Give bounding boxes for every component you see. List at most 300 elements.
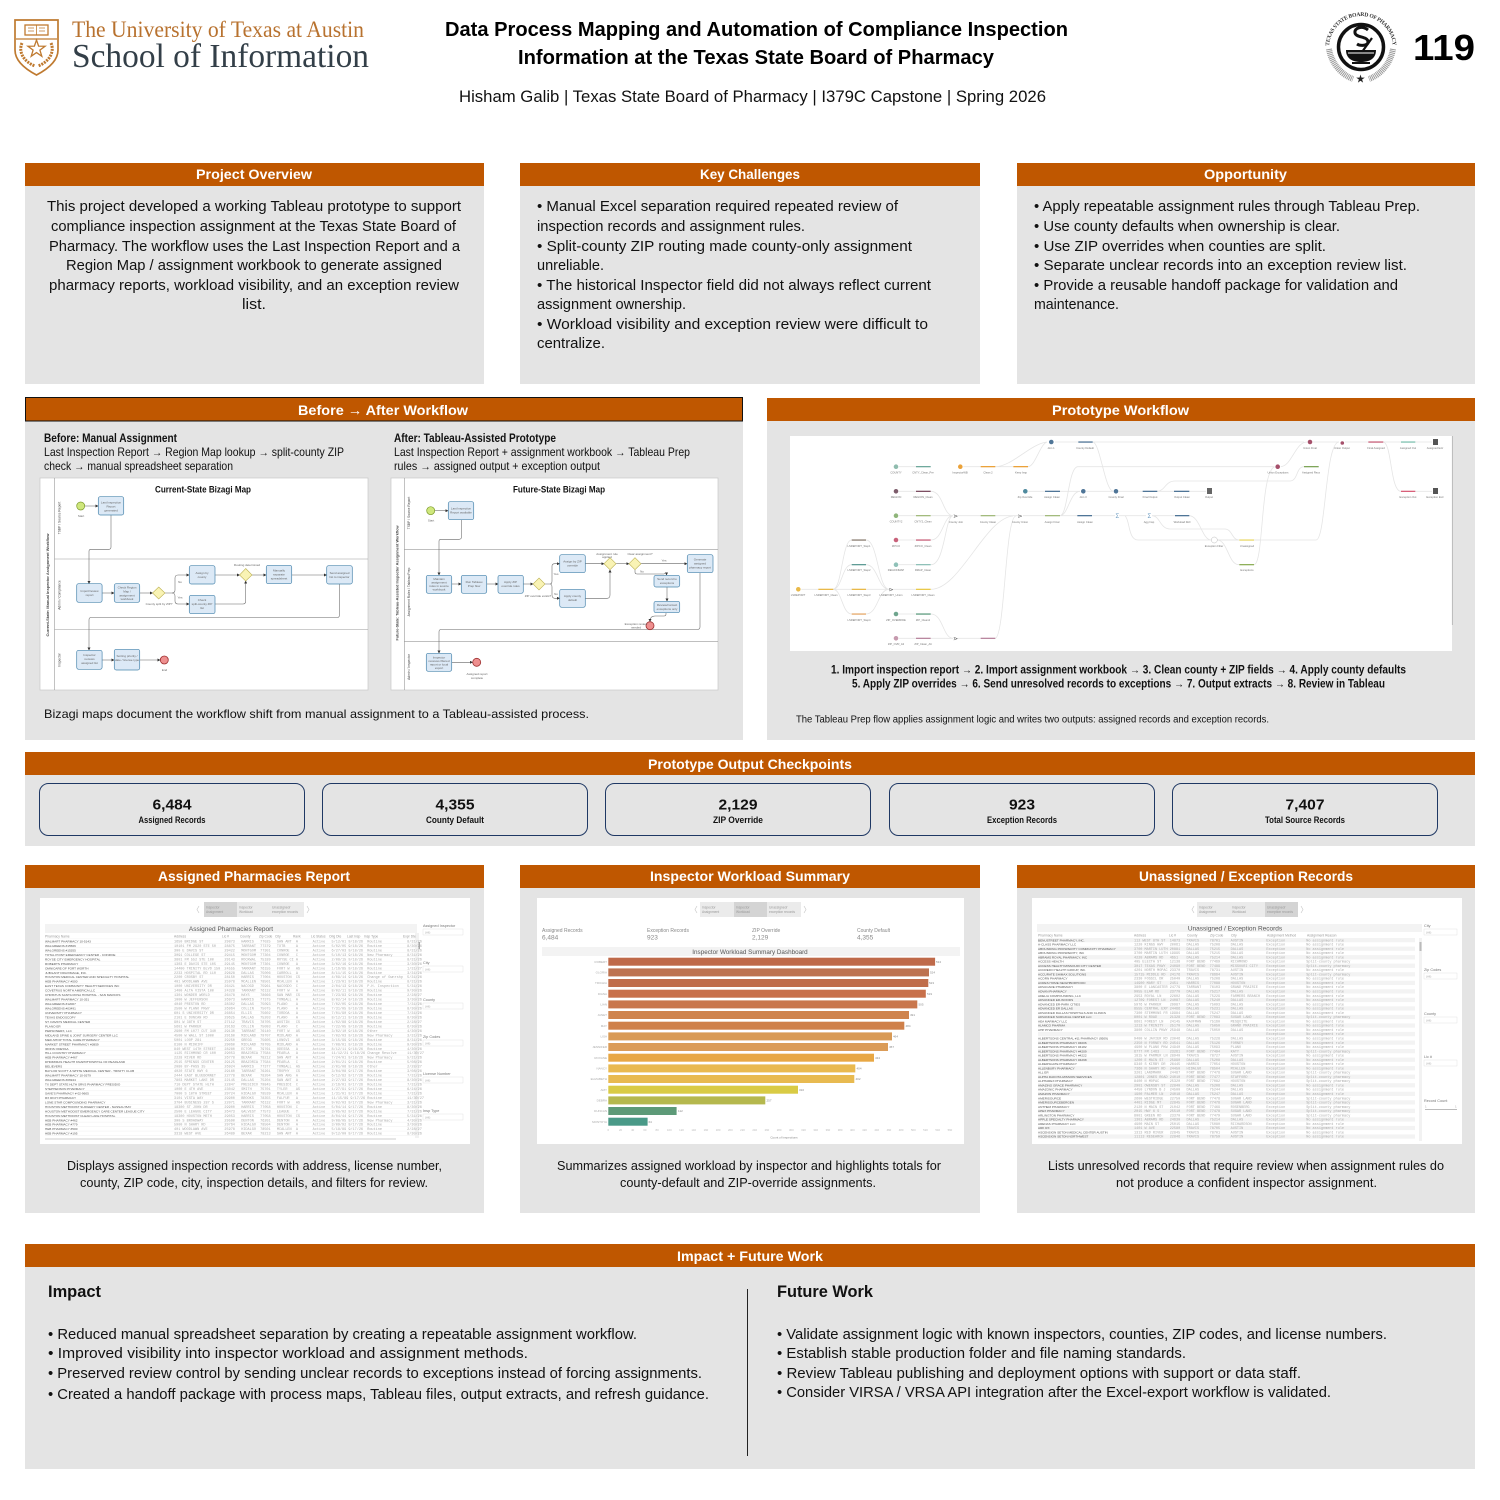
stat card: ZIP Override: 2,129 xyxy=(718,796,758,814)
flow node labels: Output xyxy=(1205,495,1213,499)
chart: current-state Bizagi map: Yes xyxy=(178,596,183,600)
x axis: 240 xyxy=(752,1128,757,1132)
heading: Project Overview: Project Overview xyxy=(196,166,312,182)
stat card: Total Source Records: Total Source Records xyxy=(1265,815,1345,825)
chart: inspector workload dashboard screenshot: Inspector xyxy=(736,906,750,910)
panel: Project Overview xyxy=(25,163,484,384)
table: assigned pharmacies dashboard screenshot: HOUSTON METHODIST SURGERY CENTER - NASSAU BAY xyxy=(45,1105,131,1109)
text block: overview: list. xyxy=(242,297,266,313)
x axis: 260 xyxy=(765,1128,770,1132)
table: exception records dashboard screenshot: Workload xyxy=(1232,910,1246,914)
text block: challenges list: unreliable. xyxy=(537,258,604,274)
column: Future Work: • Consider VIRSA / VRSA API integration after the Excel-export workflow is validated. xyxy=(777,1385,1331,1401)
bar values: 505 xyxy=(918,1002,924,1006)
text block: before description: Before: Manual Assignment xyxy=(44,432,177,445)
table: exception records dashboard screenshot: 2600 WESTRIDGE 22750 FORT BEND 77478 SUGAR LAND Exception Split-county pharmacy xyxy=(1134,1096,1350,1101)
chart: future-state Bizagi map: Generate xyxy=(694,558,707,562)
table: assigned pharmacies dashboard screenshot: WALGREENS #15355 xyxy=(45,948,76,952)
chart: future-state Bizagi map: Yes xyxy=(662,558,667,562)
x axis: 420 xyxy=(862,1128,867,1132)
table: exception records dashboard screenshot: ALBERTSONS CENTRAL #11 PHARMACY (9509) xyxy=(1038,1036,1108,1040)
flow node labels: ZIPCO xyxy=(892,544,900,548)
table: assigned pharmacies dashboard screenshot: 901 W 38TH ST 27112 TRAVIS 78705 AUSTIN CS Active 1/02/88 9/18/26 Routine 2/28/27 xyxy=(174,1020,422,1025)
text block: opportunity list: • Use county defaults when ownership is clear. xyxy=(1034,219,1340,235)
table: assigned pharmacies dashboard screenshot: 2233 HOSPITAL RD 110 29628 DALLAS 75006 CARROLL A Active 8/11/15 9/18/26 Routine 3/31/26 xyxy=(174,971,422,976)
chart: future-state Bizagi map xyxy=(391,478,718,690)
table: exception records dashboard screenshot: ALBERTSONS PHARMACY #4222 xyxy=(1038,1054,1087,1058)
table: assigned pharmacies dashboard screenshot: Expr Dte xyxy=(403,934,416,938)
table: exception records dashboard screenshot: 1213 W TRINITY 25170 DALLAS 75050 GRAND PRAIRIE Exception No assignment rule xyxy=(1134,1024,1344,1029)
x axis: 440 xyxy=(874,1128,879,1132)
table: exception records dashboard screenshot: 4450 LYNDON B J 24500 DALLAS 75244 DALLAS Exception No assignment rule xyxy=(1134,1088,1344,1093)
table: assigned pharmacies dashboard screenshot: 300 S BROADWAY 29590 DENTON 76201 DENTON A Active 9/08/05 9/17/26 New Pharmacy 4/30/26 xyxy=(174,1118,422,1123)
text block: after description: Last Inspection Report + assignment workbook → Tableau Prep xyxy=(394,446,690,459)
panel: Unassigned / Exception Records xyxy=(0,865,1475,1213)
table: assigned pharmacies dashboard screenshot: MIDLAND SPINE & JOINT SURGERY CENTER LLC xyxy=(45,1033,119,1037)
title: Data Process Mapping and Automation of Compliance Inspection xyxy=(445,19,1068,41)
text block: challenges list: assignment ownership. xyxy=(537,297,686,313)
text block: before description: check → manual spreadsheet separation xyxy=(44,460,233,473)
flow node labels: Output Clean xyxy=(1174,495,1190,499)
table: exception records dashboard screenshot: 8001 W ROAD 21328 FORT BEND 77083 SUGAR LAND Exception Split-county pharmacy xyxy=(1134,1015,1350,1020)
table: assigned pharmacies dashboard screenshot: 7803 MARKET LAKE DR 22145 DALLAS 75204 SAN ANT A Active 2/27/83 9/17/26 Routine 8/30/26 xyxy=(174,1078,422,1083)
bar values: 464 xyxy=(893,1034,898,1038)
panel: Prototype Output Checkpoints xyxy=(25,752,1475,846)
panel: Impact + Future Work xyxy=(25,1244,1475,1469)
flow node labels: LSREPORT_Union xyxy=(880,593,903,597)
chart: future-state Bizagi map: assigned xyxy=(694,562,706,566)
x axis: 160 xyxy=(704,1128,709,1132)
text block: challenges list: • The historical Inspector field did not always reflect current xyxy=(537,278,931,294)
bar values: 524 xyxy=(930,970,935,974)
table: exception records dashboard screenshot: ADVAN PHARMACY xyxy=(1038,990,1067,994)
flow node labels: Unassigned xyxy=(1240,544,1255,548)
chart: future-state Bizagi map: Last Inspection xyxy=(451,506,471,510)
table: assigned pharmacies dashboard screenshot: 18300 ST JOHN DR 29900 HARRIS 77058 HOUSTON C Active 5/04/14 9/17/26 Routine 8/30/26 xyxy=(174,1105,422,1110)
table: exception records dashboard screenshot: 112 WEST 8TH ST 14873 TRAVIS 78701 AUSTIN Exception No assignment rule xyxy=(1134,938,1344,943)
table: assigned pharmacies dashboard screenshot: 601 S UNIVERSITY DR 26854 ELLIS 75602 TXRDOA A Active 7/01/90 9/18/26 Routine 7/31/26 xyxy=(174,1011,422,1016)
chart: future-state Bizagi map: override rules xyxy=(501,584,520,588)
KPI row xyxy=(542,928,891,942)
table: exception records dashboard screenshot: 3201 LANDMARK 24487 FORT BEND 77478 SUGAR LAND Exception Split-county pharmacy xyxy=(1134,1071,1350,1076)
panel: Before and After Workflow xyxy=(25,397,743,740)
table: assigned pharmacies dashboard screenshot: 5900 N SHARY RD 29764 HIDALGO 78504 DENTON A Active 3/09/92 9/17/26 Routine 3/30/26 xyxy=(174,1123,422,1128)
filters: exception records: City xyxy=(1424,924,1431,928)
caption: assigned report: Displays assigned inspection records with address, license number, xyxy=(67,1158,442,1173)
table: assigned pharmacies dashboard screenshot: HEB PHARMACY #195 xyxy=(45,1132,78,1136)
table: exception records dashboard screenshot: exception records xyxy=(1267,910,1293,914)
table: assigned pharmacies dashboard screenshot: 2900 FM 1077 CUT 340 29130 TARRANT 76140 FORT W AS Active 3/02/10 9/18/26 Other 4/30/26 xyxy=(174,1029,422,1034)
table: exception records dashboard screenshot: ADVACARE PHARMACY xyxy=(1038,985,1073,989)
text block: overview: pharmacy reports, workload visibility, and an exception review xyxy=(49,278,459,294)
table: exception records dashboard screenshot: 3800 COLLIN PKWY 25948 DALLAS 75050 DALLAS Exception No assignment rule xyxy=(1134,1028,1344,1033)
table: exception records dashboard screenshot: Assignment Reason xyxy=(1307,934,1337,938)
caption: exception records: Lists unresolved records that require review when assignment rules do xyxy=(1048,1158,1444,1173)
chart: current-state Bizagi map: separate xyxy=(273,572,285,576)
KPI row: Exception Records xyxy=(647,928,689,934)
bar values: 112 xyxy=(678,1109,683,1113)
table: assigned pharmacies dashboard screenshot: 1000 W JEFFERSON 26973 HARRIS 77375 TOMBALL A Active 8/02/14 9/18/26 Routine 3/30/26 xyxy=(174,998,422,1003)
bar values: 310 xyxy=(799,1088,804,1092)
table: exception records dashboard screenshot: 2120 N MAIN ST 21042 FORT BEND 77469 ROSENBERG Exception Split-county pharmacy xyxy=(1134,1105,1350,1110)
table: assigned pharmacies dashboard screenshot: HEB PHARMACY #467 xyxy=(45,1056,78,1060)
title xyxy=(445,19,1068,69)
table: assigned pharmacies dashboard screenshot: EAST TEXAS COMMUNITY HEALTH SERVICES INC xyxy=(45,984,120,988)
logo: University of Texas School of Information xyxy=(15,17,369,75)
text block: opportunity list: • Use ZIP overrides when counties are split. xyxy=(1034,239,1326,255)
table: assigned pharmacies dashboard screenshot: BAYLOR SCOTT & WHITE MEDICAL CENTER - TRINITY CLUB xyxy=(45,1069,134,1073)
table: assigned pharmacies dashboard screenshot: 3318 WEST AVE 26489 BEXAR 78213 SAN ANT A Active 9/12/00 9/17/26 Routine 8/30/26 xyxy=(174,1132,422,1137)
flow node labels: Assigned Out xyxy=(1400,446,1416,450)
icon: UT shield xyxy=(15,20,58,75)
table: exception records dashboard screenshot: City xyxy=(1231,934,1237,938)
table: exception records dashboard screenshot: AHP PHARMACY xyxy=(1038,1028,1063,1032)
column: Future Work: Future Work xyxy=(777,1283,874,1301)
flow node labels: REGION xyxy=(891,495,901,499)
table: assigned pharmacies dashboard screenshot: 1301 WONDER WORLD 26478 HAYS 78666 SAN MAR CS Active 7/23/83 9/18/26 Routine 2/28/27 xyxy=(174,993,422,998)
table: exception records dashboard screenshot: ALAMCO PHARMA xyxy=(1038,1024,1066,1028)
flow node labels: Agg Insp xyxy=(1144,520,1155,524)
chart: future-state Bizagi map: Maintain xyxy=(433,577,445,581)
table: assigned pharmacies dashboard screenshot: SAVE'S PHARMACY # 02-9605 xyxy=(45,1091,89,1095)
table: exception records dashboard screenshot: AMAZONIC PHARMACY xyxy=(1038,1088,1073,1092)
table: assigned pharmacies dashboard screenshot: 2500 W PLANO PKWY 26964 COLLIN 75075 PLANO A Active 7/31/05 9/18/26 Routine 8/30/26 xyxy=(174,1007,422,1012)
table: exception records dashboard screenshot: 4220 ABRAMS RD 4651 DALLAS 75214 DALLAS Exception No assignment rule xyxy=(1134,955,1344,960)
chart: future-state Bizagi map: Admin / Inspector xyxy=(407,653,411,680)
chart: future-state Bizagi map: receives filtered xyxy=(428,659,450,663)
chart: current-state Bizagi map: Sorting priority / xyxy=(116,654,138,658)
filters: exception records: (All) xyxy=(1426,1018,1431,1022)
table: exception records dashboard screenshot: 2330 FOSSIL DR 25040 DALLAS 75208 DALLAS Exception No assignment rule xyxy=(1134,977,1344,982)
stat card: ZIP Override xyxy=(606,784,870,836)
panel: Assigned Pharmacies Report xyxy=(0,865,484,1213)
table: exception records dashboard screenshot: 1900 PALMER LN 24018 DALLAS 75247 DALLAS Exception No assignment rule xyxy=(1134,1092,1344,1097)
chart: current-state Bizagi map: split-county ZIP xyxy=(192,602,212,606)
bar names: MAY xyxy=(601,1024,607,1028)
x axis: 520 xyxy=(923,1128,928,1132)
heading: Assigned Pharmacies Report: Assigned Pharmacies Report xyxy=(158,868,350,884)
logo text: school name: School of Information xyxy=(72,38,369,75)
chart: current-state Bizagi map: generated xyxy=(104,508,118,512)
table: assigned pharmacies dashboard screenshot: Address xyxy=(174,934,186,938)
table: exception records dashboard screenshot: Pharmacy Name xyxy=(1038,934,1063,938)
flow node labels: Final Assigned xyxy=(1367,446,1385,450)
table: exception records dashboard screenshot: 9400 W JAVIER RD 23046 DALLAS 75228 DALLAS Exception No assignment rule xyxy=(1134,1036,1344,1041)
chart: future-state Bizagi map: ZIP override exists? xyxy=(525,594,552,598)
table: exception records dashboard screenshot: AMAZING GRACE PHARMACY xyxy=(1038,1083,1082,1087)
filters: exception records: (All) xyxy=(1426,974,1431,978)
table: assigned pharmacies dashboard screenshot: 18300 HOUSTON METH 29053 HARRIS 77058 HOUSTON CS Active 8/04/44 9/17/26 Routine 5/31/26 xyxy=(174,1114,422,1119)
table: assigned pharmacies dashboard screenshot: HEB PHARMACY #500 xyxy=(45,1127,78,1131)
chart: future-state Bizagi map: Future-State Bizagi Map xyxy=(513,484,605,496)
bar values: 434 xyxy=(875,1056,880,1060)
chart: current-state Bizagi map: Map / xyxy=(123,590,131,594)
bar values: 519 xyxy=(927,992,932,996)
flow node labels: County Union xyxy=(1012,520,1029,524)
stat card: Assigned Records: 6,484 xyxy=(152,796,192,814)
chart: future-state Bizagi map: Yes xyxy=(554,572,559,576)
chart: current-state Bizagi map: Check Region xyxy=(118,586,137,590)
table: exception records dashboard screenshot xyxy=(0,898,1462,1144)
x axis: 120 xyxy=(679,1128,684,1132)
flow node labels: ZIP_Clean_Alt xyxy=(914,642,932,646)
table: assigned pharmacies dashboard screenshot: 7000 S 10TH STREET 29724 HIDALGO 78539 MCALLEN A Active 1/31/01 9/17/26 Routine 7/31/26 xyxy=(174,1091,422,1096)
flow node labels: Assigned Recs xyxy=(1302,470,1321,474)
x axis: 300 xyxy=(789,1128,794,1132)
table: exception records dashboard screenshot: 7300 STEMMONS FR 19984 DALLAS 75247 DALLAS Exception No assignment rule xyxy=(1134,1011,1344,1016)
table: exception records dashboard screenshot: Inspector xyxy=(1199,906,1213,910)
table: assigned pharmacies dashboard screenshot: Orig Dte xyxy=(329,934,341,938)
column: Impact: • Created a handoff package with process maps, Tableau files, output extracts, and refresh guidance. xyxy=(48,1387,709,1403)
filters: exception records: 1 xyxy=(1455,1104,1457,1108)
stat card: Total Source Records: 7,407 xyxy=(1286,796,1324,814)
chart: future-state Bizagi map: report or local xyxy=(430,662,449,666)
chart: current-state Bizagi map: Import/review xyxy=(80,589,99,593)
table: assigned pharmacies dashboard screenshot: County xyxy=(240,934,251,938)
table: exception records dashboard screenshot: 8601 FOREST LN 24145 KAUFMAN 75160 MESQUITE Exception No assignment rule xyxy=(1134,1019,1344,1024)
flow node labels: LSREPORT_Clean xyxy=(912,593,935,597)
heading: Key Challenges: Key Challenges xyxy=(700,166,800,182)
KPI row: 4,355 xyxy=(857,934,874,942)
chart: future-state Bizagi map: Report available xyxy=(450,510,472,514)
chart: future-state Bizagi map: Run Tableau xyxy=(466,580,483,584)
table: assigned pharmacies dashboard screenshot: TEXAS ENDOSCOPY xyxy=(45,1015,76,1019)
flow nodes: input circles xyxy=(796,439,1345,641)
KPI row: ZIP Override xyxy=(752,928,780,934)
table: exception records dashboard screenshot: 2953 ROYAL LN 22602 DALLAS 75229 FARMERS BRANCH Exception No assignment rule xyxy=(1134,994,1344,999)
bar values: 534 xyxy=(936,960,941,964)
chart: current-state Bizagi map: Manually xyxy=(273,568,285,572)
table: exception records dashboard screenshot: Address xyxy=(1134,934,1146,938)
table: exception records dashboard screenshot: ACCESS HEALTH xyxy=(1038,960,1064,964)
table: exception records dashboard screenshot: AMERISOURCE xyxy=(1038,1096,1061,1100)
bar names: JENNIFER xyxy=(592,1045,608,1049)
text block: after description: rules → assigned output + exception output xyxy=(394,460,601,473)
filters: assigned report: (All) xyxy=(425,968,430,972)
table: assigned pharmacies dashboard screenshot: 14400 TRINITY BLVD 150 24555 TARRANT 76155 FORT W AS Active 1/16/85 9/18/26 Routine 1/31/27 xyxy=(174,966,422,971)
KPI row: 923 xyxy=(647,934,658,942)
table: exception records dashboard screenshot: 14900 MARY ST 2451 HARRIS 77088 HOUSTON Exception No assignment rule xyxy=(1134,981,1344,986)
text block: challenges list xyxy=(537,199,931,352)
flow node labels: County Join xyxy=(949,520,964,524)
poster number: 119 xyxy=(1413,27,1475,68)
table: exception records dashboard screenshot: A-CLASS PHARMACY LLC xyxy=(1038,943,1077,947)
chart: future-state Bizagi map: exceptions only xyxy=(657,607,678,611)
flow node labels: ZIP_OVR_Alt xyxy=(888,642,904,646)
table: assigned pharmacies dashboard screenshot: 6100 N MIDKIFF 29060 MIDLAND 79705 MIDLAND A Active 7/08/01 9/18/26 Routine 9/30/26 xyxy=(174,1042,422,1047)
table: assigned pharmacies dashboard screenshot: JUBILANT DRAXIMAGE, INC. xyxy=(45,971,87,975)
panel: Inspector Workload Summary xyxy=(520,865,980,1213)
table: exception records dashboard screenshot: 3800 E LANCASTER 24779 TARRANT 76103 GRAND PRAIRIE Exception No assignment rule xyxy=(1134,985,1344,990)
chart: current-state Bizagi map: assignment xyxy=(119,594,135,598)
table: assigned pharmacies dashboard screenshot: WALMART PHARMACY 10-5143 xyxy=(45,939,91,943)
chart: future-state Bizagi map: exceptions xyxy=(660,581,675,585)
filters: assigned report: Assigned Inspector xyxy=(423,924,456,928)
chart: current-state Bizagi map: Admin / Compliance xyxy=(58,580,62,610)
table: exception records dashboard screenshot: ALDERSGATE PHARMACY xyxy=(1038,1062,1077,1066)
x axis: 380 xyxy=(838,1128,843,1132)
chart: future-state Bizagi map: complete xyxy=(471,676,483,680)
table: assigned pharmacies dashboard screenshot: 3704 BUSINESS 287 S 22071 TARRANT 76132 FORT W AS Active 9/02/03 9/17/26 New Pharmacy 3/31/26 xyxy=(174,1100,422,1105)
table: exception records dashboard screenshot: Unassigned / Exception Records xyxy=(1188,926,1283,932)
stat card: Assigned Records: Assigned Records xyxy=(138,815,206,825)
table: exception records dashboard screenshot: ADVANCED ER DALLAS xyxy=(1038,1007,1073,1011)
table: exception records dashboard screenshot: 8400 N MOPAC 25320 FORT BEND 77082 HOUSTON Exception Split-county pharmacy xyxy=(1134,1079,1350,1084)
chart: current-state Bizagi map: Report xyxy=(106,504,116,508)
stat card: County Default xyxy=(322,784,588,836)
table: exception records dashboard screenshot: 4201 NORTH MOPAC 23370 TRAVIS 78731 AUSTIN Exception No assignment rule xyxy=(1134,968,1344,973)
table: assigned pharmacies dashboard screenshot: IRONS ODESSA xyxy=(45,1047,69,1051)
chart: future-state Bizagi map: No xyxy=(640,570,644,574)
caption: workload summary: Summarizes assigned workload by inspector and highlights totals for xyxy=(557,1158,942,1173)
stat card: Exception Records: Exception Records xyxy=(987,815,1057,825)
table: exception records dashboard screenshot: 1313 RED RIVER 22845 TRAVIS 78701 AUSTIN Exception No assignment rule xyxy=(1134,1130,1344,1135)
chart: future-state Bizagi map: Assignment rule xyxy=(596,552,618,556)
chart: current-state Bizagi map: spreadsheet xyxy=(271,576,287,580)
chart: future-state Bizagi map: TSBP / Source Report xyxy=(407,497,411,529)
filters: exception records: Zip Codes xyxy=(1424,968,1441,972)
table: assigned pharmacies dashboard screenshot: PERSONERX, LLC xyxy=(45,1029,73,1033)
chart: current-state Bizagi map: Routing determined xyxy=(234,563,260,567)
icon: Texas State Board of Pharmacy seal: TEXAS STATE BOARD OF PHARMACY xyxy=(1325,12,1396,46)
table: exception records dashboard screenshot: ADELIA COMPOUNDING, LLC xyxy=(1038,994,1082,998)
chart: future-state Bizagi map: No xyxy=(554,592,558,596)
x axis: 500 xyxy=(911,1128,916,1132)
table: assigned pharmacies dashboard screenshot: 2515 SPRINGS CENTER 29125 BRAZORIA 77584 PEARLA C Active 2/01/21 9/18/26 Routine 5/08/26 xyxy=(174,1060,422,1065)
caption: assigned report xyxy=(67,1158,442,1190)
x axis: 280 xyxy=(777,1128,782,1132)
flow node labels: Join 3 xyxy=(1079,495,1087,499)
table: exception records dashboard screenshot: ANTHEM PHARMACY xyxy=(1038,1105,1069,1109)
chart: current-state Bizagi map: Inspector xyxy=(83,653,96,657)
chart: inspector workload dashboard screenshot: Unassigned/ xyxy=(769,906,787,910)
chart: current-state Bizagi map: reviews xyxy=(84,657,95,661)
chart: future-state Bizagi map: Assigned report xyxy=(466,672,488,676)
table: assigned pharmacies dashboard screenshot: HEB PHARMACY #779 xyxy=(45,1123,78,1127)
text block: opportunity list: maintenance. xyxy=(1034,297,1119,313)
stat card: Assigned Records xyxy=(40,784,304,836)
table: assigned pharmacies dashboard screenshot: 2444 EAST BLUEBONNET 22778 BEXAR 78204 SAN ANG A Active 6/12/82 9/17/26 Routine 7/31/26 xyxy=(174,1074,422,1079)
table: assigned pharmacies dashboard screenshot: WALGREENS #15566 xyxy=(45,944,76,948)
text block: overview: This project developed a working Tableau prototype to support xyxy=(47,199,461,215)
x axis: 360 xyxy=(826,1128,831,1132)
stat card: Total Source Records xyxy=(1172,784,1438,836)
table: exception records dashboard screenshot: 8555 CENTRAL EXP 24466 DALLAS 75231 DALLAS Exception No assignment rule xyxy=(1134,1007,1344,1012)
table: exception records dashboard screenshot: Exception No assignment rule xyxy=(1134,1032,1344,1037)
text block: challenges list: centralize. xyxy=(537,336,605,352)
table: exception records dashboard screenshot: 15715 MIDDLE RD 24176 TRAVIS 78664 AUSTIN Exception Split-county pharmacy xyxy=(1134,972,1350,977)
flow node labels: LSREPORT xyxy=(791,593,806,597)
table: exception records dashboard screenshot: ADVANCED SURGICAL CENTER LLC xyxy=(1038,1015,1092,1019)
table: exception records dashboard screenshot: ADVANCED DALLAS HOSPITALS AND CLINICS xyxy=(1038,1011,1106,1015)
table: assigned pharmacies dashboard screenshot: Lic # xyxy=(222,934,229,938)
chart: future-state Bizagi map: Send record to xyxy=(657,577,677,581)
table: exception records dashboard screenshot: 3017 TEXAS PKWY 24090 FORT BEND 77489 MISSOURI CITY Exception Split-county pharmacy xyxy=(1134,964,1350,969)
chart: inspector workload dashboard screenshot: Inspector xyxy=(702,906,716,910)
filters: assigned report: (All) xyxy=(425,1078,430,1082)
table: exception records dashboard screenshot: ALPHAREX PHARMACY xyxy=(1038,1079,1073,1083)
table: assigned pharmacies dashboard screenshot: Assignment xyxy=(206,910,223,914)
table: assigned pharmacies dashboard screenshot: 710 DEPT STATE HLTH 22847 PRESIDIO 79845 PRESIDI C Active 2/16/01 9/17/26 Routine 7/31/26 xyxy=(174,1083,422,1088)
table: exception records dashboard screenshot: ACCURATE SHIMAX SOLUTIONS xyxy=(1038,972,1086,976)
table: assigned pharmacies dashboard screenshot: HOUSTON MEDICAL CENTER AND SPECIALTY HOSPITAL xyxy=(45,975,130,979)
table: assigned pharmacies dashboard screenshot: PLANO ER xyxy=(45,1024,61,1028)
chart: Tableau Prep flow xyxy=(790,436,1452,651)
bar names: ELIZABETH xyxy=(591,1077,607,1081)
table: assigned pharmacies dashboard screenshot: HOUSTON METHODIST EMERGENCY CARE CENTER LEAGUE CITY xyxy=(45,1109,145,1113)
heading: Prototype Workflow: Prototype Workflow xyxy=(1052,402,1189,418)
text block: challenges list: • Manual Excel separation required repeated review of xyxy=(537,199,899,215)
table: exception records dashboard screenshot: 2901 OWENSBY ST 22840 DALLAS 75208 DALLAS Exception No assignment rule xyxy=(1134,1083,1344,1088)
table: assigned pharmacies dashboard screenshot: OMNICARE OF FORT WORTH xyxy=(45,966,88,970)
column: Impact: • Improved visibility into inspector workload and assignment methods. xyxy=(48,1346,528,1362)
table: assigned pharmacies dashboard screenshot: Lic Status xyxy=(311,934,326,938)
column: Impact: • Reduced manual spreadsheet separation by creating a repeatable assignment workflow. xyxy=(48,1327,637,1343)
caption: exception records xyxy=(1048,1158,1444,1190)
table: assigned pharmacies dashboard screenshot: Workload xyxy=(239,910,253,914)
x axis: 0 xyxy=(608,1128,610,1132)
table: assigned pharmacies dashboard screenshot: exception records xyxy=(272,910,298,914)
bar values: 457 xyxy=(889,1045,894,1049)
table: assigned pharmacies dashboard screenshot: HILL COUNTRY PHARMACY xyxy=(45,1051,86,1055)
flow node labels: ZIPCO_Clean xyxy=(915,544,932,548)
text block: numbered workflow steps: 1. Import inspection report → 2. Import assignment workbook → 3. Clean county + ZIP fields → 4. Apply county defaults xyxy=(831,664,1406,676)
heading: Impact + Future Work: Impact + Future Work xyxy=(677,1248,823,1264)
table: exception records dashboard screenshot: 1301 ABRAMS RD 24630 DALLAS 75214 DALLAS Exception No assignment rule xyxy=(1134,1118,1344,1123)
flow node labels xyxy=(791,446,1444,646)
x axis: 340 xyxy=(813,1128,818,1132)
table: exception records dashboard screenshot: ARK RX xyxy=(1038,1126,1050,1130)
table: exception records dashboard screenshot: 12709 FOREST LN 24087 DALLAS 75240 DALLAS Exception No assignment rule xyxy=(1134,998,1344,1003)
flow nodes: join icons and outputs: ⋗ xyxy=(888,588,894,594)
chart: future-state Bizagi map: default xyxy=(568,598,577,602)
bar values: 484 xyxy=(906,1024,911,1028)
panel: Opportunity xyxy=(1017,163,1475,384)
x axis xyxy=(608,1128,953,1140)
flow node labels: LSREPORT_Step4 xyxy=(848,618,871,622)
table: exception records dashboard screenshot: 405 ELECTA ST 12138 FORT BEND 77469 RICHMOND Exception Split-county pharmacy xyxy=(1134,960,1350,965)
table: assigned pharmacies dashboard screenshot: 4040 PRESTON RD 28302 DALLAS 75093 PLANO A Active 7/02/05 9/18/26 Routine 7/31/26 xyxy=(174,1002,422,1007)
flow node labels: Final Output xyxy=(1143,495,1158,499)
table: exception records dashboard screenshot: 4401 RIDGE MT 22845 FORT BEND 77478 SUGAR LAND Exception Split-county pharmacy xyxy=(1134,1101,1350,1106)
chart: current-state Bizagi map: Start xyxy=(78,514,84,518)
flow node labels: REGION_Clean xyxy=(913,495,933,499)
table: assigned pharmacies dashboard screenshot: ROBERTS PHARMACY xyxy=(45,962,78,966)
flow node labels: Keep Insp xyxy=(1015,470,1028,474)
flow node labels: Assigned Extr xyxy=(1427,446,1443,450)
table: exception records dashboard screenshot: 1815 W PARMER LN 28940 TRAVIS 78727 AUSTIN Exception No assignment rule xyxy=(1134,1054,1344,1059)
table: exception records dashboard screenshot: ASCENSION SETON MEDICAL CENTER AUSTIN xyxy=(1038,1130,1108,1134)
bar values: 404 xyxy=(856,1066,862,1070)
flow node labels: County Clean xyxy=(980,520,997,524)
table: assigned pharmacies dashboard screenshot: ST. DAVID'S MEDICAL CENTER xyxy=(45,1020,91,1024)
flow node labels: REGIONMAP xyxy=(888,568,904,572)
flow node labels: InspectorWB xyxy=(952,470,968,474)
filters: exception records: Record Count xyxy=(1424,1099,1448,1103)
x axis: 100 xyxy=(667,1128,672,1132)
bar values: 523 xyxy=(929,981,934,985)
KPI row: 6,484 xyxy=(542,934,559,942)
x axis: 540 xyxy=(935,1128,940,1132)
table: exception records dashboard screenshot: ACORN PHARMACY xyxy=(1038,977,1068,981)
table: exception records dashboard screenshot: 9055 ELAM RD 23770 DALLAS 75217 DALLAS Exception No assignment rule xyxy=(1134,990,1344,995)
table: exception records dashboard screenshot: Zip Code xyxy=(1210,934,1224,938)
flow node labels: Join 1 xyxy=(1047,446,1055,450)
x axis: 40 xyxy=(631,1128,635,1132)
table: exception records dashboard screenshot: Unassigned/ xyxy=(1267,906,1285,910)
flow node labels: County Default xyxy=(1076,446,1094,450)
table: exception records dashboard screenshot: ALPHA DAKOTA-MISSION SERVICES xyxy=(1038,1075,1092,1079)
